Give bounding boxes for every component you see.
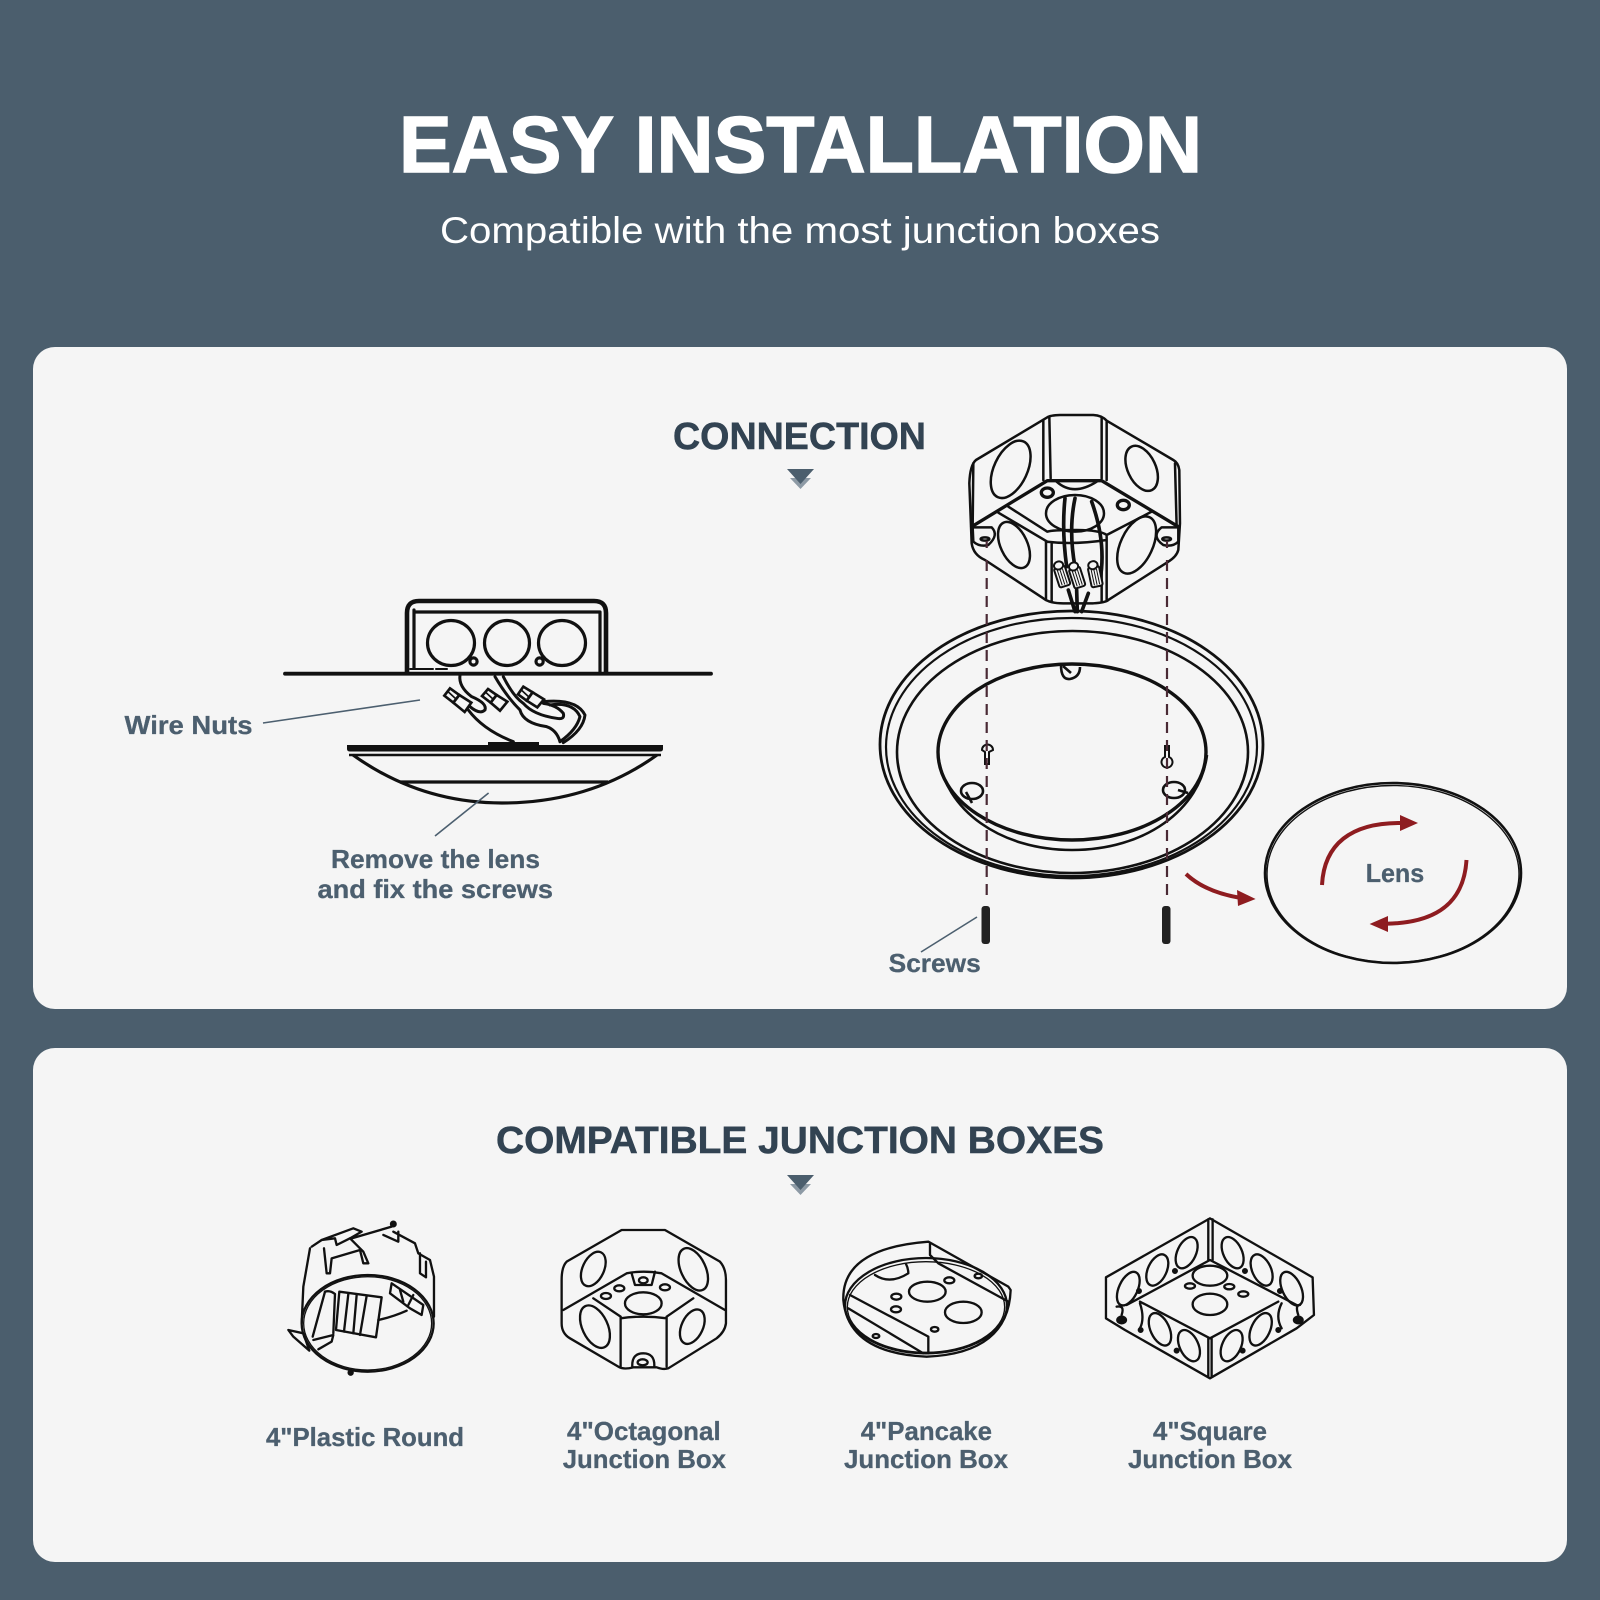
arrow: rotate clockwise bottom [1370, 860, 1466, 932]
label: square: Junction Box [1128, 1444, 1293, 1474]
wires and wire nuts [444, 675, 585, 743]
label: pancake [844, 1416, 1009, 1474]
label: plastic round: 4"Plastic Round [266, 1422, 464, 1452]
label: octagonal: 4"Octagonal [567, 1416, 721, 1446]
label: lens: Lens [1366, 858, 1424, 888]
label: square: 4"Square [1153, 1416, 1267, 1446]
dashed screw guides [987, 541, 1167, 902]
junction box side view [407, 601, 606, 673]
label: wire nuts [124, 700, 420, 740]
title: EASY INSTALLATION [399, 100, 1202, 189]
label: remove the lens [318, 793, 553, 904]
icon: heading chevron [787, 1175, 814, 1195]
icon: octagonal box [562, 1230, 726, 1369]
panel: connection [33, 347, 1567, 1009]
icon: square box [1106, 1218, 1314, 1378]
arrow: lens removal [1186, 874, 1256, 906]
label: octagonal [563, 1416, 727, 1474]
wire nuts on octagonal box [1052, 560, 1103, 589]
icon: pancake box [843, 1242, 1011, 1357]
diagram: mounting ring [880, 611, 1263, 878]
screws [982, 906, 1170, 944]
label: screws: Screws [889, 948, 981, 978]
label: wire nuts: Wire Nuts [124, 710, 252, 740]
icon: plastic round box [288, 1222, 434, 1375]
arrow: rotate clockwise top [1322, 815, 1418, 885]
ceiling line [285, 672, 711, 676]
label: remove the lens: and fix the screws [318, 874, 553, 904]
label: pancake: Junction Box [844, 1444, 1009, 1474]
heading: connection: CONNECTION [673, 416, 926, 458]
panel: compatible junction boxes [33, 1048, 1567, 1562]
label: screws [889, 917, 981, 978]
label: octagonal: Junction Box [563, 1444, 727, 1474]
heading: compatible junction boxes: COMPATIBLE JUNCTION BOXES [496, 1120, 1104, 1162]
label: pancake: 4"Pancake [861, 1416, 992, 1446]
icon: heading chevron [787, 469, 814, 489]
lens [1265, 783, 1521, 963]
diagram: ceiling box and fixture side view [285, 601, 711, 803]
subtitle: Compatible with the most junction boxes [440, 210, 1160, 251]
label: remove the lens: Remove the lens [331, 844, 540, 874]
ceiling fixture with lens [347, 742, 663, 803]
diagram: octagonal junction box [969, 415, 1180, 612]
label: square [1128, 1416, 1293, 1474]
